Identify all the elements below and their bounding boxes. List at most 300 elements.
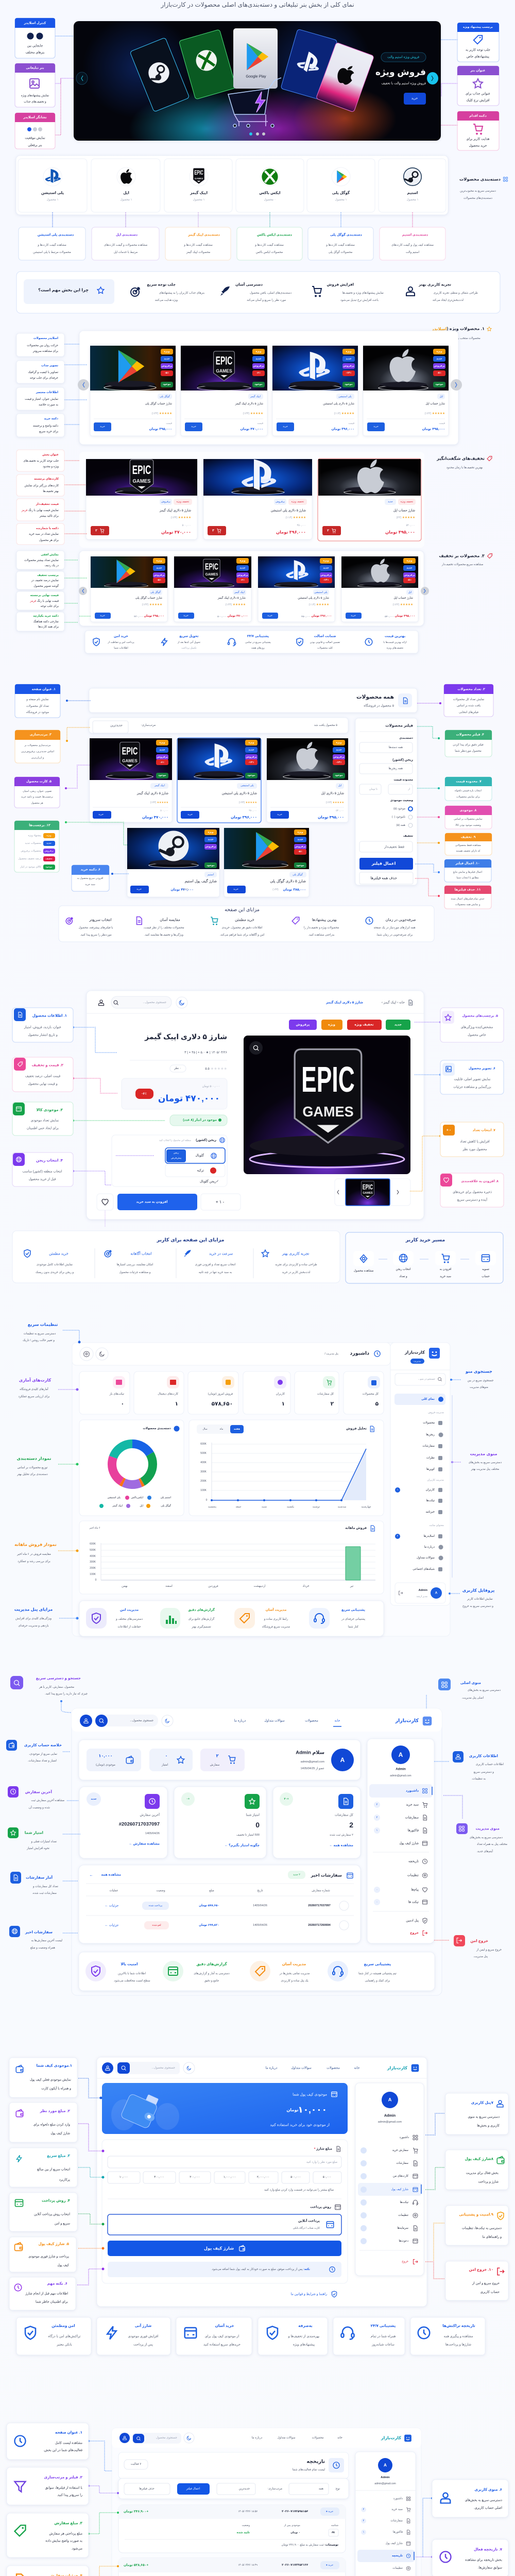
category: apple: اپل xyxy=(123,191,129,195)
card: last order: مشاهده سفارش ← xyxy=(129,1842,160,1845)
panel: wallet page xyxy=(97,2057,427,2307)
panel: filters: تا تومان xyxy=(369,788,378,791)
callout: product filter: فیلتر دقیق برای پیدا کردن xyxy=(453,743,484,747)
top nav: جستجوی محصول... xyxy=(130,1719,154,1722)
category note: epic xyxy=(165,227,231,260)
benefit: experience xyxy=(262,1250,317,1274)
callout: charge wallet xyxy=(9,2237,76,2272)
categories heading xyxy=(459,177,508,200)
benefit: management: یک پنل ساده و کاربردی xyxy=(281,1979,308,1982)
note: search access xyxy=(10,1675,88,1696)
recent orders table xyxy=(79,1865,360,1943)
callout: quantity: محصول مورد نظر xyxy=(462,1148,487,1151)
wallet sidebar: admin@gmail.com xyxy=(378,2121,402,2124)
note: quick settings: و تغییر حالت روشن / تاریک xyxy=(23,1338,55,1342)
order: 7: شناسه xyxy=(331,2524,338,2527)
panel: toolbar xyxy=(89,718,348,733)
benefit: management: مدیریت تمامی بخش‌ها در xyxy=(279,1972,310,1975)
category: google play: ۱ محصول xyxy=(335,198,347,201)
panel: filters: محدوده قیمت xyxy=(393,778,414,782)
recent orders table: پرداخت شده xyxy=(149,1904,163,1907)
top nav: کارت‌بازار xyxy=(387,2066,407,2071)
callout: filter sort: را سریع‌تر پیدا کنید. xyxy=(57,2494,82,2497)
note: order stats: تعداد کل سفارشات و xyxy=(32,1885,58,1888)
chart: sales analysis line: دوشنبه xyxy=(313,1505,320,1509)
callout: labels: محصولات جدید xyxy=(25,842,41,845)
callout: product count: یافت شده بر اساس xyxy=(457,704,480,707)
history sidebar: فاکتورها xyxy=(393,2530,403,2534)
trust strip xyxy=(85,631,418,653)
step: add to cart: افزودن به xyxy=(440,1268,452,1271)
discount product: playstation: ۳ xyxy=(212,529,214,533)
note: your points: امتیاز شما xyxy=(25,1830,43,1835)
callout: quick amount: ۳. مبلغ سریع xyxy=(47,2154,71,2158)
amount chips xyxy=(108,2172,341,2183)
category note: apple xyxy=(92,227,159,260)
stat: products: کل محصولات xyxy=(363,1392,379,1396)
order: 6: خرید ● xyxy=(326,2564,333,2567)
card: last order: آخرین سفارش xyxy=(140,1812,160,1817)
order: 7: #۷ xyxy=(332,2531,335,2534)
callout: desired amount: ۲. مبلغ مورد نظر xyxy=(39,2108,71,2113)
account summary: امتیاز xyxy=(161,1764,168,1767)
product labels: جدید xyxy=(394,1023,402,1026)
note: recent orders: لیست آخرین سفارش‌ها به xyxy=(31,1939,62,1942)
admin sidebar: مدیر ارشد xyxy=(417,1595,427,1598)
note: last order: مشاهده آخرین سفارش ثبت xyxy=(31,1799,64,1802)
product: playstation: ۱۳٪- xyxy=(323,579,329,582)
product: google play: ★★★★★ (۱۳۳) xyxy=(152,412,172,415)
category note: google play xyxy=(308,227,373,260)
callout: action button: هدایت کاربر برای xyxy=(467,137,489,141)
callout: horizontal view xyxy=(16,551,64,569)
panel: page benefits xyxy=(59,906,434,942)
recent orders table: جزئیات ← xyxy=(105,1904,119,1907)
product meta xyxy=(130,1051,227,1072)
callout: product labels xyxy=(440,1008,504,1042)
callout: product filter: محصول موردنظر شما xyxy=(455,750,482,753)
admin sidebar: خبرنامه xyxy=(425,1511,435,1514)
admin sidebar: جستجو در منو... xyxy=(418,1378,435,1381)
note: safe exit: خروج امن xyxy=(470,1938,488,1943)
benefit: time: صرفه‌جویی در زمان xyxy=(386,917,416,922)
note: search access: جستجو و دسترسی سریع xyxy=(36,1675,81,1681)
callout: safe exit xyxy=(445,2261,508,2300)
banner text: فروش ویژه استیم والت xyxy=(387,56,419,59)
discount product: epic: شارژ ۵ دلاری اپیک گیمز xyxy=(159,508,191,512)
category note: epic: مشاهده گیفت کارت‌ها و xyxy=(183,243,213,247)
callout: slider indicator xyxy=(15,113,55,149)
trust: price xyxy=(365,635,407,650)
history heading xyxy=(118,2452,349,2479)
product: epic xyxy=(174,556,251,622)
benefit: security: امنیت بالا xyxy=(121,1962,138,1966)
product card: steam: خرید xyxy=(136,888,142,891)
stock pill: موجود در انبار (۸ عدد) xyxy=(183,1118,217,1122)
category note: apple: دسته‌بندی اپل xyxy=(116,233,138,237)
callout: buy button: برای خرید سریع xyxy=(39,430,58,433)
region selector: ✓ ریجن گلوبال xyxy=(200,1179,219,1183)
product: google play: گوگل پلی xyxy=(160,395,170,398)
step: add to cart: سبد خرید xyxy=(440,1275,451,1278)
product: google play: خرید xyxy=(100,425,105,428)
callout: buy button xyxy=(16,414,64,437)
note: safe exit: پنل مدیریت. xyxy=(473,1955,488,1958)
callout: active history: بخش تاریخچه برای مشاهده xyxy=(465,2558,502,2562)
callout: stock: برای ایجاد حس اطمینان xyxy=(27,1126,59,1130)
category: google play xyxy=(307,159,375,212)
note: quick settings: تنظیمات سریع xyxy=(28,1322,58,1327)
benefit: safe: و ریجن برای خریدی بدون ریسک xyxy=(36,1270,74,1274)
amount chips: ۱,۰۰۰,۰۰۰ xyxy=(224,2176,236,2179)
heading: amazing discounts xyxy=(436,455,492,469)
discount product: apple: ۵۴۰,۰۰۰ xyxy=(406,524,415,527)
product card: playstation active: شارژ ۵ دلاری پلی استیشن xyxy=(222,791,257,795)
amount chips: ۵۰,۰۰۰ xyxy=(323,2176,331,2179)
top nav: کارت‌بازار xyxy=(381,2436,401,2441)
callout: user panel: ۷پنل کاربری xyxy=(471,2100,494,2105)
callout: important note: ۶. نکته مهم xyxy=(47,2281,67,2285)
stat: tickets xyxy=(79,1371,130,1414)
benefit: management: مدیریت آسان xyxy=(282,1961,306,1966)
benefit: safe xyxy=(24,1250,74,1274)
callout: desired amount: وارد کردن مبلغ دلخواه برای xyxy=(33,2123,70,2127)
callout: sorting: و ارزان‌ترین xyxy=(31,756,44,759)
note: category chart xyxy=(16,1456,51,1476)
callout: product filter xyxy=(445,730,492,757)
benefit: support xyxy=(333,2317,405,2355)
product card: playstation active: خرید xyxy=(187,813,193,816)
callout: user menu: ۶. منوی کاربری xyxy=(474,2487,502,2492)
callout: payment method: سریع و امن xyxy=(55,2222,70,2226)
step: checkout: حساب xyxy=(482,1275,490,1278)
order: 6: ۲۰۲۶۰۷۱۷۳۳۵۲۱۲# xyxy=(282,2564,308,2567)
wallet sidebar: سفارش خرید xyxy=(392,2149,408,2152)
card: playstation xyxy=(281,29,337,100)
benefit: user: تجربه کاربری بهتر xyxy=(418,282,451,286)
note: order stats: سفارشات ثبت شده. xyxy=(32,1892,57,1895)
note: your points: تعداد امتیازات فعلی و xyxy=(30,1840,57,1843)
callout: wallet balance: نمایش موجودی فعلی کیف پول xyxy=(30,2078,71,2081)
chart: monthly sales: اردیبهشت xyxy=(253,1585,266,1588)
note: category chart: نمودار دسته‌بندی xyxy=(17,1456,51,1461)
callout: product filter: ۴. فیلتر محصولات xyxy=(456,733,484,737)
product card: apple: ۴۹۵,۰۰۰ تومان xyxy=(318,815,344,819)
product card: epic: ۵۰۰,۰۰۰ xyxy=(160,809,168,812)
stat: users: ۱ xyxy=(282,1401,285,1407)
note: account summary xyxy=(6,1740,62,1762)
callout: important note xyxy=(9,2277,76,2310)
note: user info: اطلاعات کاربری xyxy=(469,1754,498,1758)
callout: short info: اطلاعات مختصر xyxy=(36,391,58,394)
benefit: easy buy xyxy=(176,2317,252,2355)
callout: discount label xyxy=(16,571,64,589)
panel: toolbar: مرتب‌سازی: xyxy=(141,724,156,727)
product card: playstation active xyxy=(177,738,261,823)
wallet sidebar: کارت‌های من xyxy=(393,2174,408,2178)
product card: apple: ★★★★★ (۱۲۳) xyxy=(326,801,345,804)
benefit: offers: به‌راحتی مشاهده کنید. xyxy=(308,933,335,937)
callout: choose region: قبل از خرید محصول xyxy=(29,1178,56,1181)
admin sidebar: نظرات xyxy=(426,1456,435,1460)
admin header xyxy=(72,1343,390,1365)
product: epic: خرید xyxy=(183,614,188,617)
card: all orders: +۲۰ xyxy=(284,1798,289,1801)
callout: user panel: دسترسی سریع به منوی xyxy=(468,2115,500,2119)
panel: page benefits: مزایای این صفحه xyxy=(225,907,260,913)
callout: short info xyxy=(16,387,64,410)
panel: filters: از xyxy=(407,788,410,791)
callout: page title: فعالیت‌های شما در این بخش. xyxy=(43,2448,82,2452)
category note: google play: محصولات گوگل پلی xyxy=(329,250,352,254)
benefit: time: همه ابزارهای موردنیاز در یک صفحه xyxy=(373,926,416,929)
add to cart row xyxy=(97,1194,241,1210)
product card: steam: ۴۷۰,۰۰۰ تومان xyxy=(170,888,194,891)
chart: sales analysis line: ماه xyxy=(220,1428,224,1431)
category note: xbox: محصولات ایکس باکس xyxy=(256,250,283,254)
note: main menu: منوی اصلی xyxy=(460,1681,481,1685)
product card: playstation active: پلی استیشن xyxy=(241,784,254,787)
card: your points: 0 xyxy=(255,1821,260,1829)
history sidebar: تاریخچه xyxy=(392,2554,403,2557)
callout: attractive image: حرفه‌ای برای جلب توجه xyxy=(30,377,59,380)
product meta: ۱۴۰۵/۰۴/۲۶ | ★ ۵.۰ + | ۴۵ + | ۳ xyxy=(184,1051,227,1054)
benefit: history: شارژها و پرداخت‌ها xyxy=(445,2343,471,2346)
note: user profile: و دسترسی سریع به خروج xyxy=(462,1605,493,1608)
product: epic: موجود xyxy=(254,383,263,386)
callout: price and discount: قیمت اصلی، درصد تخفیف xyxy=(25,1075,60,1078)
header tools: جستجوی محصول... xyxy=(143,1001,167,1004)
slider dots xyxy=(249,132,265,135)
callout: important note: اطلاعات مهم قبل از انجام شارژ xyxy=(25,2292,68,2296)
stat: digital cards: ۱ xyxy=(175,1401,178,1407)
callout: product info: عنوان، بازدید، فروش، امتیاز xyxy=(24,1025,61,1029)
trust: fast: تحویل سریع xyxy=(179,635,199,638)
callout: highlighted price xyxy=(16,591,64,610)
category: apple: ۱ محصول xyxy=(121,198,132,201)
card: last order: جدید xyxy=(91,1798,97,1801)
benefit: compare: ویژگی‌ها و تخفیف‌ها مقایسه کنید. xyxy=(144,933,183,937)
card: all orders: مشاهده همه ← xyxy=(329,1843,353,1848)
callout: unified buy button: دکمه خرید یکپارچه xyxy=(33,614,59,618)
callout: discount xyxy=(445,833,492,855)
benefit: compare: مقایسه آسان xyxy=(160,917,180,922)
callout: horizontal view: در یک ردیف xyxy=(45,564,59,567)
charge form: روش پرداخت xyxy=(310,2205,331,2209)
trust: genuine: تضمین اصالت و قانونی بودن xyxy=(310,641,340,644)
callout: highlighted price: برای جلب توجه xyxy=(41,605,59,608)
connectors: discounted xyxy=(64,560,91,622)
user sidebar: تنظیمات xyxy=(407,1873,419,1877)
product card: epic: ★★★★★ (۱۳۳) xyxy=(150,801,169,804)
benefit: reports: جامع و دقیق xyxy=(204,1979,219,1982)
top nav: درباره ما xyxy=(234,1719,246,1723)
recent orders table: لغو شده xyxy=(152,1924,161,1927)
product card: epic: خرید xyxy=(98,813,104,816)
trust: support xyxy=(228,635,271,650)
note: user info: و دسترسی سریع xyxy=(474,1771,494,1774)
callout: promo banner: بنر تبلیغاتی xyxy=(26,66,44,70)
callout: product card xyxy=(14,777,60,808)
callout: discount label: نمایش درصد تخفیف در xyxy=(31,579,59,582)
wallet benefit cards xyxy=(16,2317,485,2355)
callout: remove filters: و نمایش همه محصولات xyxy=(455,903,480,906)
trust: support: پشتیبانی سریع در تمامی xyxy=(245,641,271,644)
benefit: cart: باعث افزایش نرخ تبدیل می‌شود xyxy=(340,299,379,302)
top nav: خانه xyxy=(335,1719,340,1723)
benefit: reports: گزارش‌های دقیق xyxy=(188,1607,215,1612)
chart: categories donut xyxy=(79,1420,184,1516)
chart: monthly sales: بهمن xyxy=(122,1585,128,1588)
callout: counter button: نمایش تعداد در سبد خرید xyxy=(29,533,59,536)
benefit: easy buy: خرید آسان xyxy=(215,2323,234,2328)
note: admin menu: مختلف پنل مدیریت بهتر xyxy=(471,1468,499,1471)
category note: xbox: دسته‌بندی ایکس باکس xyxy=(257,233,293,237)
benefit: security: سطح امنیت محافظت می‌شود. xyxy=(113,1979,150,1982)
callout: slider control: جابجایی بین xyxy=(27,44,43,47)
callout: slider control xyxy=(15,18,55,58)
product card: apple: شارژ ۵ دلاری اپل xyxy=(321,791,344,795)
benefit: support: تیم پشتیبانی همیشه در کنار شما xyxy=(358,1972,397,1975)
callout: attractive image: تصاویر با کیفیت و گرافیک xyxy=(28,370,58,374)
product: apple xyxy=(341,556,418,622)
connectors: categories xyxy=(53,212,413,227)
stat: tickets: تیکت‌های باز xyxy=(109,1392,124,1396)
trust: support: روزهای هفته xyxy=(251,647,265,650)
benefit: reports xyxy=(163,1961,230,1982)
category note: steam: مشاهده کیف پول و گیفت کارت‌های xyxy=(391,243,434,247)
callout: security support: دسترسی به تیکت‌ها، تنظیمات xyxy=(462,2227,502,2230)
callout: order amount: ۳. مبلغ سفارش xyxy=(54,2520,83,2526)
benefit: reports: دسترسی به آمار و گزارش‌های xyxy=(194,1971,230,1975)
callout: wishlist: ذخیره محصول برای خریدهای xyxy=(453,1190,492,1194)
callout: unified buy button xyxy=(16,612,64,631)
chart: sales analysis line: 600K xyxy=(200,1443,207,1446)
discount product: apple: ۴۹۵,۰۰۰ تومان xyxy=(385,530,415,535)
amount chips: ۲,۰۰۰,۰۰۰ xyxy=(257,2176,269,2179)
category note: steam xyxy=(380,227,445,260)
panel: toolbar: جدیدترین xyxy=(110,723,123,727)
callout: product card: ۵. کارت محصول xyxy=(26,780,52,783)
discount product: playstation: پرفروش xyxy=(276,500,285,503)
history heading: لیست تمام فعالیت‌های شما xyxy=(293,2468,325,2471)
panel: filters: تخفیف xyxy=(403,835,413,838)
admin sidebar: اسلایدرها xyxy=(424,1535,435,1538)
admin sidebar: Admin xyxy=(419,1589,428,1592)
benefit: easy buy: از موجودی کیف پول برای xyxy=(205,2335,239,2338)
stat: products xyxy=(344,1371,384,1414)
charge form: مبلغ مورد نظر را وارد کنید xyxy=(306,2160,337,2164)
panel: product page xyxy=(87,991,424,1219)
stat: sales: فروش امروز (تومان) xyxy=(208,1393,233,1396)
benefit: experience: تجربه کاربری بهتر xyxy=(282,1251,309,1256)
chart: sales analysis line: 400K xyxy=(200,1461,207,1464)
history sidebar: سفارشات xyxy=(390,2519,403,2522)
note: menu search: جستجوی منو xyxy=(465,1369,492,1375)
callout: attractive image: تصویر جذاب xyxy=(41,364,58,367)
amount chips: ۵۰۰,۰۰۰ xyxy=(290,2176,301,2179)
note: admin benefits: مزایای پنل مدیریت xyxy=(14,1607,53,1613)
callout: product card: برچسب‌ها، قیمت و دکمه خرید xyxy=(21,795,53,799)
callout: apply filter xyxy=(444,859,491,882)
product: google play: ★★★★★ (۱۳۳) xyxy=(142,603,162,606)
discount product: epic: ★★★★★ (۱۳۴) xyxy=(171,516,191,519)
heading: amazing discounts: تخفیف‌های شگفت‌انگیز xyxy=(436,455,485,462)
benefit: user xyxy=(406,282,478,302)
discount product: playstation: ★★★★★ (۱۱۴) xyxy=(286,516,306,519)
benefit: quick choice: انتخاب سریع‌تر xyxy=(89,917,112,922)
chart: monthly sales: خرداد xyxy=(302,1585,310,1588)
callout: highlighted cards: کارت‌های برجسته xyxy=(34,477,59,481)
panel: filters: موجود (۵) xyxy=(393,807,405,810)
chart: sales analysis line xyxy=(189,1420,384,1516)
chart: categories donut: اپل xyxy=(140,1504,143,1507)
callout: highlighted cards: بهتر تخفیف‌ها xyxy=(43,490,59,493)
callout: page title: نمایش نام صفحه و xyxy=(26,698,49,701)
wallet sidebar: شارژ کیف پول xyxy=(391,2188,408,2191)
callout: product slider xyxy=(16,333,64,357)
product: playstation: ۳۹۶,۰۰۰ تومان ۴۵۰,۰۰۰ xyxy=(301,615,332,618)
admin sidebar: ۱ xyxy=(397,1488,398,1492)
callout: promo banner xyxy=(15,63,55,107)
product: epic: ★★★★★ (۱۳۴) xyxy=(226,603,246,606)
note: account summary: نمایی سریع از موجودی، xyxy=(29,1753,57,1756)
callout: section title: ویژه و محدود xyxy=(43,465,59,468)
region selector: پیش‌فرض xyxy=(171,1157,182,1160)
callout: banner title xyxy=(457,66,499,106)
callout: order amount: می‌شود. xyxy=(71,2547,82,2550)
note: menu search: جستجوی سریع در بین xyxy=(468,1379,494,1382)
product: apple: شارژ حساب اپل xyxy=(393,597,413,600)
payment method: کارت شتاب / درگاه بانکی xyxy=(293,2226,320,2230)
region selector xyxy=(112,1135,227,1187)
stat: sales: ۵۷۸,۶۵۰ xyxy=(212,1401,233,1407)
callout: quick amount: انتخاب سریع از بین مبالغ xyxy=(37,2168,70,2171)
callout: wishlist: آینده و دسترسی سریع xyxy=(457,1197,487,1201)
callout: safe exit: ۱۰. خروج امن xyxy=(469,2267,493,2272)
filter bar: اعمال فیلتر xyxy=(186,2487,200,2490)
product: epic: اپیک گیمز xyxy=(234,590,245,594)
product: epic: قیمت xyxy=(257,422,264,425)
card: steam xyxy=(130,38,190,112)
shopping cart xyxy=(228,78,281,127)
benefit: informed: امکان مقایسه، بررسی امتیازها xyxy=(117,1263,153,1266)
arrows xyxy=(79,587,429,595)
callout: offer label xyxy=(457,23,499,62)
discount product: epic: ۴۷۰,۰۰۰ تومان xyxy=(161,530,191,535)
category: steam xyxy=(379,159,446,212)
payment method xyxy=(108,2214,341,2235)
category: epic: ۱ محصول xyxy=(193,198,204,201)
recent orders table: 1405/04/26 xyxy=(253,1904,267,1907)
history sidebar: A xyxy=(384,2463,387,2468)
product card: epic: ۴۷۰,۰۰۰ تومان xyxy=(142,815,168,819)
callout: sorting xyxy=(15,730,60,763)
callout: labels: پیشنهاد ویژه xyxy=(28,834,42,837)
wallet balance card: ۱۰,۰۰۰ تومان xyxy=(286,2105,327,2114)
callout: action button: خرید محصول xyxy=(469,144,487,147)
callout: safe exit: حساب کاربری xyxy=(480,2291,500,2294)
callout: order amount: مبلغ پرداختی هر سفارش xyxy=(49,2532,82,2536)
step arrows xyxy=(379,1259,469,1260)
product card: apple: موجود xyxy=(335,774,343,777)
product: epic: ۴۷۰,۰۰۰ تومان xyxy=(240,428,263,431)
callout: short info: به صورت خلاصه xyxy=(39,403,58,406)
wallet sidebar: داشبورد xyxy=(399,2136,409,2139)
benefit: safe: امن ومطمئن xyxy=(52,2324,75,2328)
note: search access: محصول، سفارش، کاربر یا هر xyxy=(39,1685,74,1689)
top nav: درباره ما xyxy=(252,2436,263,2439)
